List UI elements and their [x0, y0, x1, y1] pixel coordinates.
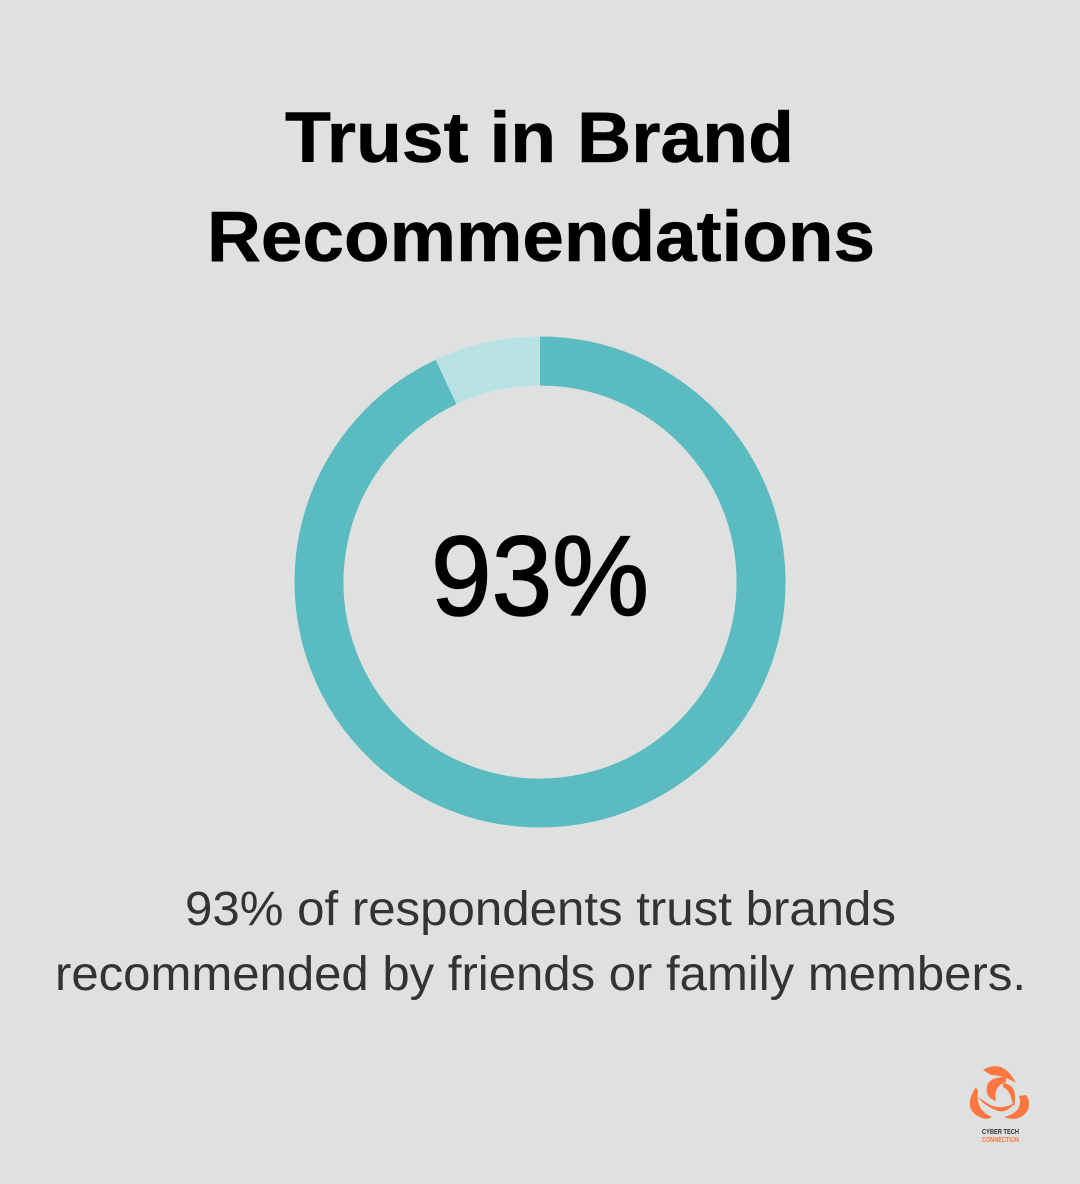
center value: 93% — [431, 513, 649, 639]
title — [207, 99, 875, 277]
description text — [55, 883, 1026, 1001]
title: Trust in Brand — [285, 99, 794, 178]
logo: Cyber Tech Connection — [970, 1066, 1029, 1144]
donut chart: 93% — [319, 361, 761, 803]
logo icon: three swooshes — [970, 1066, 1029, 1119]
logo text: Cyber Tech: CYBER TECH — [982, 1129, 1019, 1136]
logo text: Connection: CONNECTION — [982, 1137, 1019, 1144]
title: Recommendations — [207, 198, 875, 277]
description text: recommended by friends or family members. — [55, 948, 1026, 1001]
donut segment: 93% — [319, 361, 761, 803]
donut segment: remaining 7% — [446, 361, 540, 382]
description text: 93% of respondents trust brands — [185, 883, 896, 936]
